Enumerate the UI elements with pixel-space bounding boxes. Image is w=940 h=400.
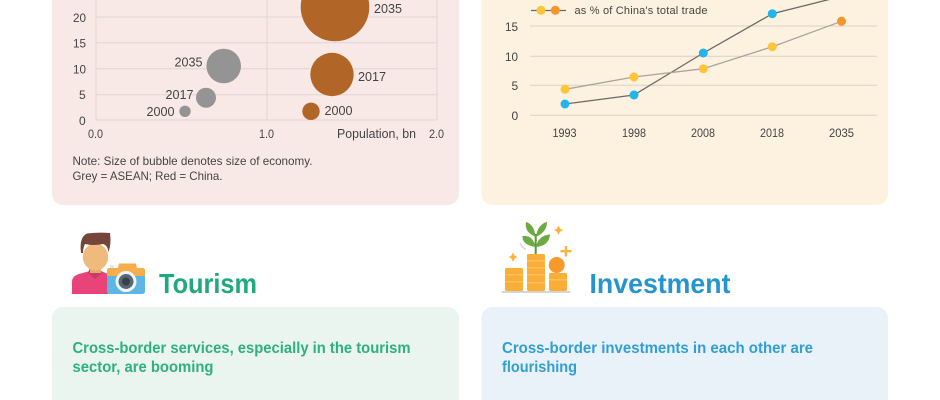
bubble year labels: 2017 [358, 69, 386, 84]
panel: population and economy bubble chart [52, 0, 459, 205]
heading: Tourism: Tourism [159, 268, 257, 299]
y axis labels: 0 [512, 109, 518, 123]
x axis labels [88, 126, 444, 141]
investment description: Cross-border investments in each other are [502, 340, 813, 357]
panel: trade share line chart [482, 0, 888, 205]
investment description: flourishing [502, 359, 577, 376]
x axis labels: 0.0 [88, 129, 103, 141]
x axis labels: 1998 [622, 128, 646, 140]
line series: share of China trade [560, 17, 846, 94]
bubble year labels [146, 1, 402, 119]
y axis labels: 15 [73, 36, 86, 50]
panel: tourism text [52, 307, 459, 400]
y axis labels: 10 [505, 50, 518, 64]
bubble year labels: 2000 [146, 104, 174, 119]
tourism description: sector, are booming [72, 359, 214, 376]
icon: coins with sprout [502, 222, 572, 293]
bubble year labels: 2000 [324, 103, 352, 118]
chart note: Note: Size of bubble denotes size of economy. [72, 154, 312, 168]
x axis labels: 2008 [691, 128, 715, 140]
bubble year labels: 2017 [166, 87, 194, 102]
y axis labels [505, 20, 518, 123]
chart note: Grey = ASEAN; Red = China. [72, 169, 222, 183]
y axis labels: 15 [505, 20, 518, 34]
line series: share of ASEAN trade [560, 0, 842, 108]
y axis labels: 5 [79, 88, 86, 102]
icon: tourist with camera [72, 233, 145, 294]
tourism description [72, 340, 410, 376]
tourism description: Cross-border services, especially in the tourism [72, 340, 410, 357]
x axis labels: Population, bn [337, 126, 416, 141]
investment description [502, 340, 813, 376]
y axis labels: 0 [79, 114, 86, 128]
heading: Investment: Investment [590, 268, 730, 299]
x axis labels: 1.0 [259, 129, 274, 141]
x axis labels [552, 128, 854, 140]
x axis labels: 2018 [760, 128, 784, 140]
y axis labels: 5 [512, 79, 518, 93]
bubbles: China [301, 0, 369, 120]
panel: investment text [482, 307, 888, 400]
chart note [72, 154, 312, 183]
y axis labels [73, 11, 86, 128]
x axis labels: 1993 [552, 128, 576, 140]
bubble year labels: 2035 [374, 1, 402, 16]
y axis labels: 20 [73, 11, 86, 25]
y axis labels: 10 [73, 62, 86, 76]
x axis labels: 2035 [829, 128, 854, 140]
x axis labels: 2.0 [429, 129, 444, 141]
bubble year labels: 2035 [174, 54, 202, 70]
chart legend: as % of China's total trade [574, 5, 708, 17]
bubbles: ASEAN [179, 49, 241, 117]
